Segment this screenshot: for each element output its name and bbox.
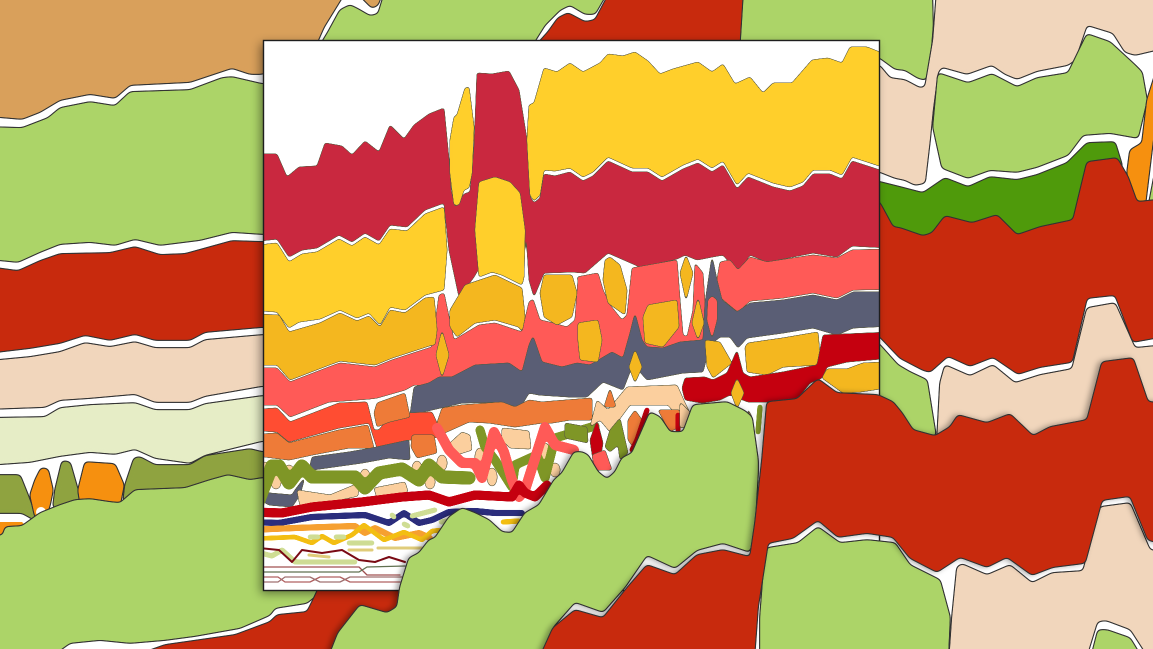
background: upper left green stream — [0, 77, 300, 262]
stream: gold short ribbon — [503, 521, 519, 522]
stream: gold spindle over red — [731, 380, 744, 407]
background: orange spike — [1127, 65, 1153, 208]
background: right light green stream — [933, 34, 1147, 178]
stream: peach blobs — [260, 428, 560, 506]
stream: olive ribbon left — [255, 465, 469, 510]
stream: olive ribbon right — [480, 426, 595, 487]
stream: yellow right — [527, 47, 892, 201]
background: lower left red stream — [120, 585, 410, 649]
stream: dark red ribbon — [250, 485, 547, 513]
background: small green wedge — [870, 335, 936, 438]
stream: coral ribbon right — [437, 427, 574, 497]
background: lower left green stream — [0, 475, 340, 649]
stream: orange segments — [250, 393, 592, 460]
stream: slate far left — [265, 480, 304, 507]
stream: gold ribbon — [250, 525, 442, 543]
foreground: green mountain — [327, 402, 758, 649]
stream: slate grey — [410, 256, 892, 415]
stream: navy ribbon — [250, 511, 522, 523]
background: large right red stream — [870, 158, 1153, 374]
panel: chart card shadow — [264, 40, 880, 590]
stream: yellow block — [475, 177, 525, 285]
background: left beige stream — [0, 335, 300, 409]
background: top right green stream — [740, 0, 933, 80]
background: top green stream — [316, 0, 610, 52]
background: pale green stream — [0, 396, 300, 465]
stream: pale gold lines — [309, 548, 422, 557]
stream: thin bottom lines — [250, 566, 405, 582]
stream: coral right — [717, 249, 892, 312]
stream: crimson — [250, 71, 892, 297]
stream: coral main — [250, 260, 708, 417]
background: dark green stream — [870, 142, 1122, 260]
background: top red stream — [530, 0, 745, 52]
stream: yellow narrow — [450, 87, 474, 205]
stream: golden segments — [250, 255, 820, 383]
stream: gold over right corner — [822, 362, 879, 393]
stream: maroon line — [250, 547, 405, 562]
background: left red stream — [0, 241, 300, 353]
stream: tangled cluster near valley — [565, 385, 760, 470]
stream: slate left ribbon — [309, 440, 410, 470]
stream: orange ribbon — [250, 526, 430, 538]
panel: stream graph card — [250, 47, 892, 582]
background: bottom green stream — [760, 527, 950, 649]
stream: coral spot inside grey — [707, 296, 717, 339]
stream: red orange left — [264, 402, 437, 446]
background: tan stream — [0, 0, 384, 119]
stream: yellow left — [250, 207, 447, 328]
stream: pale green ribbons — [250, 510, 447, 562]
background: right beige lower stream — [937, 303, 1153, 450]
stream: dark red right segment — [682, 332, 892, 403]
panel: border — [264, 40, 880, 590]
foreground: red mountain — [538, 358, 1153, 649]
background: olive and orange bumps — [0, 449, 300, 535]
background: bottom right beige stream — [949, 503, 1153, 649]
background: top right beige stream — [870, 0, 1153, 185]
background: bottom right green bump — [1086, 621, 1150, 649]
